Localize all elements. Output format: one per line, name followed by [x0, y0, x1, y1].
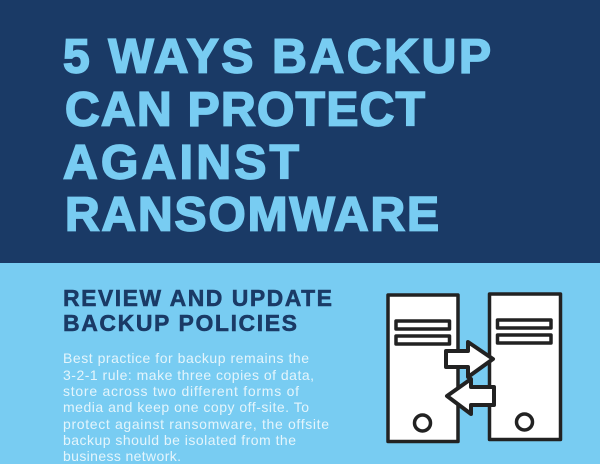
body text: protect against ransomware, the offsite: [63, 416, 329, 432]
title: CAN PROTECT: [65, 84, 425, 136]
icon: two servers exchanging data: [388, 294, 560, 442]
icon: right server: [490, 294, 560, 440]
body text: media and keep one copy off-site. To: [63, 399, 309, 415]
body text: [63, 350, 329, 464]
body text: Best practice for backup remains the: [63, 350, 309, 366]
section heading: REVIEW AND UPDATE: [63, 285, 332, 311]
section heading: [63, 285, 332, 336]
body text: backup should be isolated from the: [63, 432, 296, 448]
title: RANSOMWARE: [65, 188, 439, 242]
section heading: BACKUP POLICIES: [63, 310, 297, 336]
arrow: pointing left: [447, 379, 494, 414]
title: 5 WAYS BACKUP: [63, 30, 491, 84]
title: [63, 30, 491, 242]
body text: business network.: [63, 448, 181, 464]
title: AGAINST: [63, 136, 299, 190]
panel: backup policies section: [0, 263, 600, 464]
icon: left server: [388, 295, 458, 442]
body text: store across two different forms of: [63, 383, 299, 399]
body text: 3-2-1 rule: make three copies of data,: [63, 367, 314, 383]
panel: title banner: [0, 0, 600, 263]
arrow: pointing right: [446, 342, 493, 377]
